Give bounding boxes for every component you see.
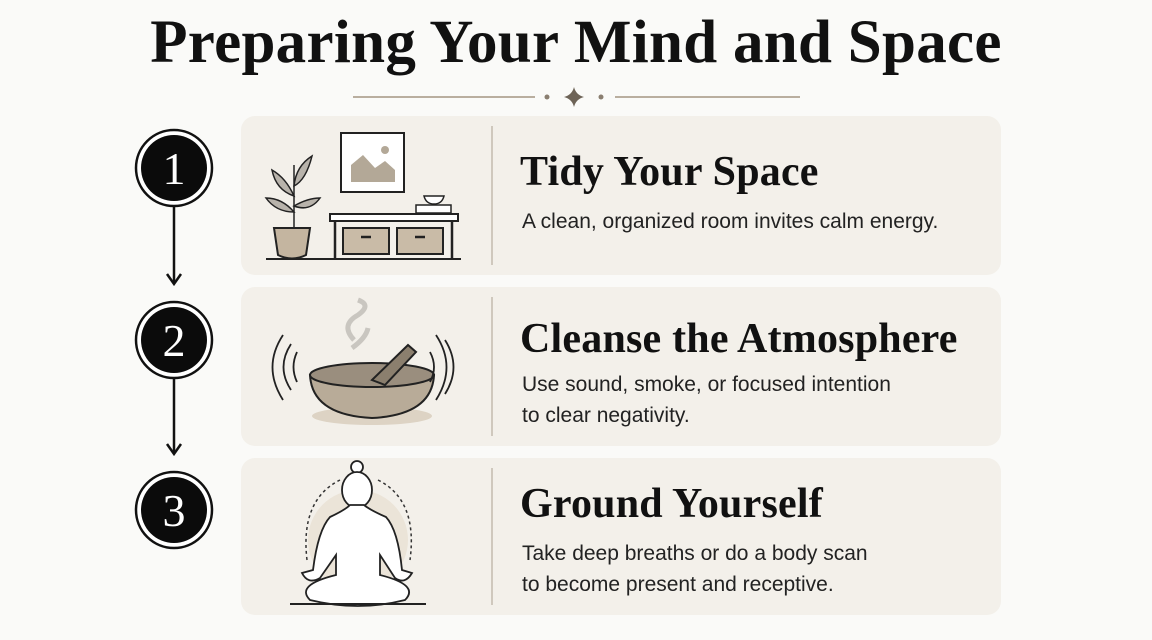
heading: Cleanse the Atmosphere xyxy=(520,316,958,362)
arrow 2 xyxy=(167,378,181,454)
text: to clear negativity. xyxy=(522,404,690,427)
circle 3: 3 xyxy=(162,485,186,536)
icon: singing bowl xyxy=(272,298,454,425)
text xyxy=(522,542,868,596)
text: A clean, organized room invites calm energy. xyxy=(522,210,938,233)
text xyxy=(522,373,891,427)
heading: Ground Yourself xyxy=(520,481,823,527)
panel: tidy your space xyxy=(241,116,1001,275)
step timeline xyxy=(134,128,214,550)
text: Use sound, smoke, or focused intention xyxy=(522,373,891,396)
heading: Tidy Your Space xyxy=(520,149,819,195)
circle 3 xyxy=(136,472,212,548)
icon: meditating person xyxy=(290,460,426,607)
circle 2 xyxy=(136,302,212,378)
arrow 1 xyxy=(167,206,181,284)
icon: room with plant, picture, cabinet xyxy=(264,132,461,260)
circle 1 xyxy=(136,130,212,206)
title: Preparing Your Mind and Space xyxy=(150,9,1002,76)
panel: ground yourself xyxy=(241,458,1001,615)
title ornament xyxy=(353,87,800,107)
circle 1: 1 xyxy=(162,143,186,194)
text: to become present and receptive. xyxy=(522,573,834,596)
panel: cleanse the atmosphere xyxy=(241,287,1001,446)
circle 2: 2 xyxy=(162,315,186,366)
text: Take deep breaths or do a body scan xyxy=(522,542,868,565)
